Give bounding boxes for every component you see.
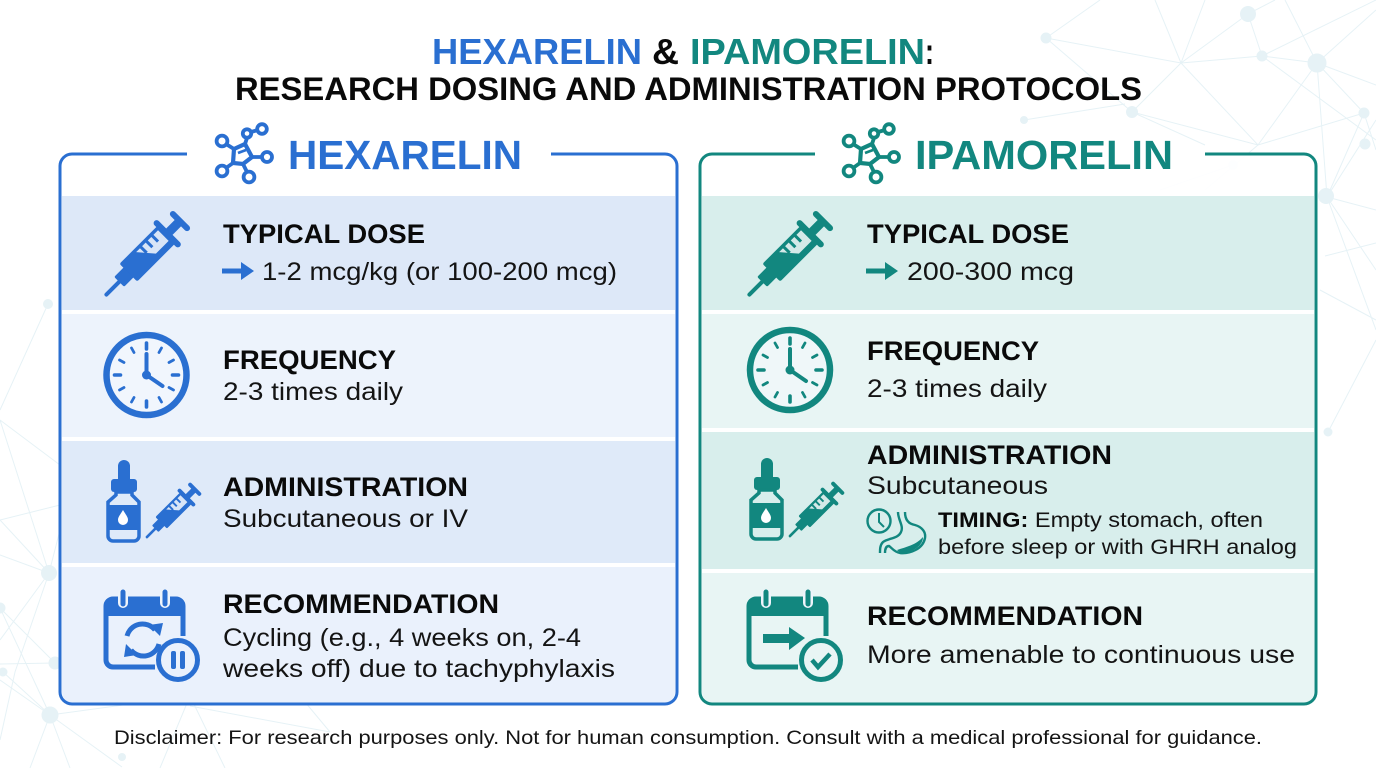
title: HEXARELIN [432,31,642,72]
text: typical dose: TYPICAL DOSE [223,219,425,249]
text: administration: Subcutaneous or IV [223,505,468,533]
text: administration: ADMINISTRATION [867,440,1112,470]
panel: Ipamorelin [700,124,1316,704]
text: frequency [867,336,1048,403]
rows: Ipamorelin backgrounds [702,155,1314,703]
title: : [925,31,934,72]
text: frequency: 2-3 times daily [867,375,1048,403]
text: recommendation: Cycling (e.g., 4 weeks on, 2-4 [223,624,581,652]
title [235,31,1142,107]
text: recommendation: RECOMMENDATION [223,589,499,619]
rows: Hexarelin backgrounds [62,155,675,703]
panel border [60,154,677,704]
text: typical dose: 200-300 mcg [907,258,1074,286]
text: typical dose [222,219,617,286]
text: typical dose: TYPICAL DOSE [867,219,1069,249]
disclaimer: Disclaimer: For research purposes only. Not for human consumption. Consult with a medical professional for guidance. [114,727,1262,749]
icon: syringe [96,210,191,305]
text: recommendation: weeks off) due to tachyphylaxis [222,655,615,683]
text: administration [867,440,1112,500]
title: RESEARCH DOSING AND ADMINISTRATION PROTOCOLS [235,71,1142,107]
text: timing [938,508,1297,559]
icon: clock [750,330,830,410]
icon: calendar with cycle and pause [104,592,198,680]
text: administration: ADMINISTRATION [223,472,468,502]
text: recommendation: RECOMMENDATION [867,601,1143,631]
title: IPAMORELIN [690,31,925,72]
text: timing: TIMING: Empty stomach, often [938,508,1263,532]
icon: syringe [739,210,834,305]
icon: molecule [844,124,899,182]
text: frequency [223,345,404,406]
text: administration [223,472,468,533]
text: timing: before sleep or with GHRH analog [938,535,1297,559]
text: administration: Subcutaneous [867,472,1048,500]
icon: dropper bottle and syringe [108,460,202,544]
text: recommendation [867,601,1295,669]
icon: calendar with arrow and check [747,592,840,680]
icon: clock [106,335,186,415]
panel: Hexarelin [60,124,677,704]
text: frequency: FREQUENCY [223,345,396,375]
text: frequency: 2-3 times daily [223,378,404,406]
icon: molecule [217,124,272,182]
panel border [700,154,1316,704]
heading: Ipamorelin: IPAMORELIN [915,132,1173,178]
text: recommendation [222,589,615,683]
heading: Hexarelin: HEXARELIN [288,132,522,178]
text: typical dose [866,219,1074,286]
text: frequency: FREQUENCY [867,336,1039,366]
icon: clock and stomach [868,510,925,553]
icon: dropper bottle and syringe [751,458,845,543]
title: & [652,31,679,72]
text: typical dose: 1-2 mcg/kg (or 100-200 mcg) [262,258,617,286]
text: recommendation: More amenable to continuous use [867,641,1295,669]
